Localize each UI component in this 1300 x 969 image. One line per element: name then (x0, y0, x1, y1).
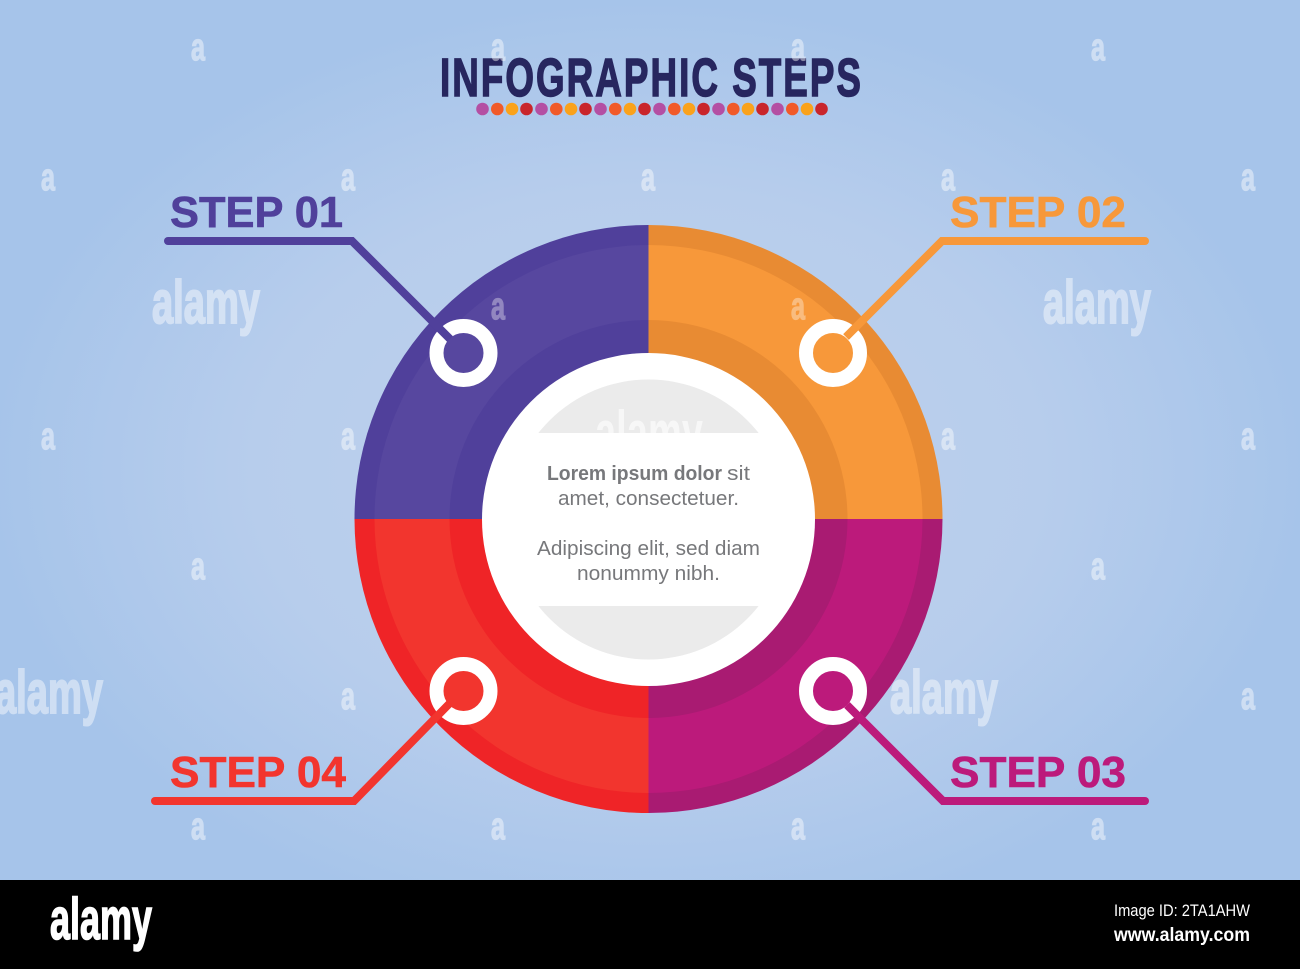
segment: step 01 purple (354, 225, 648, 519)
watermark on background: a (1091, 546, 1106, 588)
watermark on donut (491, 286, 806, 328)
segment: step 04 red (354, 519, 648, 813)
watermark on donut: a (491, 286, 506, 328)
footer url: www.alamy.com (1113, 925, 1250, 946)
watermark on background: a (791, 806, 806, 848)
title: INFOGRAPHIC STEPS (440, 48, 863, 108)
watermark on background: alamy (152, 269, 260, 336)
step 03 callout (806, 664, 1149, 805)
watermark on background: a (191, 546, 206, 588)
step 03 connector (847, 705, 1149, 805)
watermark on background: a (341, 157, 356, 199)
watermark on background: a (491, 27, 506, 69)
center decorative grey caps (508, 380, 788, 660)
center text: Adipiscing elit, sed diam (537, 538, 760, 560)
watermark on background: a (1241, 676, 1256, 718)
watermark on background: a (491, 806, 506, 848)
step 01 ring (436, 326, 490, 380)
segment: step 02 orange (648, 225, 942, 519)
center text (537, 463, 760, 585)
step 04 connector (151, 703, 450, 805)
footer logo: alamy (50, 887, 152, 952)
watermark on background: alamy (890, 659, 998, 726)
watermark on background: a (191, 806, 206, 848)
footer image id: Image ID: 2TA1AHW (1114, 901, 1250, 920)
center white circle (482, 353, 815, 686)
step 01 connector (164, 237, 450, 339)
watermark on background: a (341, 676, 356, 718)
step 04 callout (151, 664, 490, 805)
step 02 callout (806, 188, 1149, 380)
watermark on background: a (1241, 416, 1256, 458)
step 03 label: STEP 03 (950, 748, 1126, 797)
watermark on background: a (941, 416, 956, 458)
watermark on background: a (341, 416, 356, 458)
step 01 callout (164, 188, 490, 380)
center text: amet, consectetuer. (558, 488, 739, 510)
step 02 connector (846, 237, 1149, 337)
step 02 ring (806, 326, 860, 380)
donut chart (354, 225, 942, 813)
footer bar (0, 880, 1300, 969)
watermark on background: a (941, 157, 956, 199)
center text: nonummy nibh. (577, 563, 720, 585)
watermark on background: a (41, 157, 56, 199)
segment: step 03 magenta (648, 519, 942, 813)
step 02 label: STEP 02 (950, 188, 1126, 237)
watermark on donut: a (791, 286, 806, 328)
watermark on background: a (1091, 806, 1106, 848)
watermark on background: alamy (0, 659, 103, 726)
center text: Lorem ipsum dolor (547, 463, 722, 485)
step 04 ring (436, 664, 490, 718)
step 01 label: STEP 01 (170, 188, 343, 237)
center decorative grey caps: alamy (595, 399, 703, 466)
watermark on background: a (791, 27, 806, 69)
watermark on background: alamy (1043, 269, 1151, 336)
center text: sit (727, 463, 751, 485)
step 04 label: STEP 04 (170, 748, 347, 797)
step 03 ring (806, 664, 860, 718)
watermark on background: a (1241, 157, 1256, 199)
watermark on background: a (191, 27, 206, 69)
watermark on background: a (641, 157, 656, 199)
title dot row (476, 103, 828, 115)
watermark on background: a (1091, 27, 1106, 69)
watermark on background: a (41, 416, 56, 458)
